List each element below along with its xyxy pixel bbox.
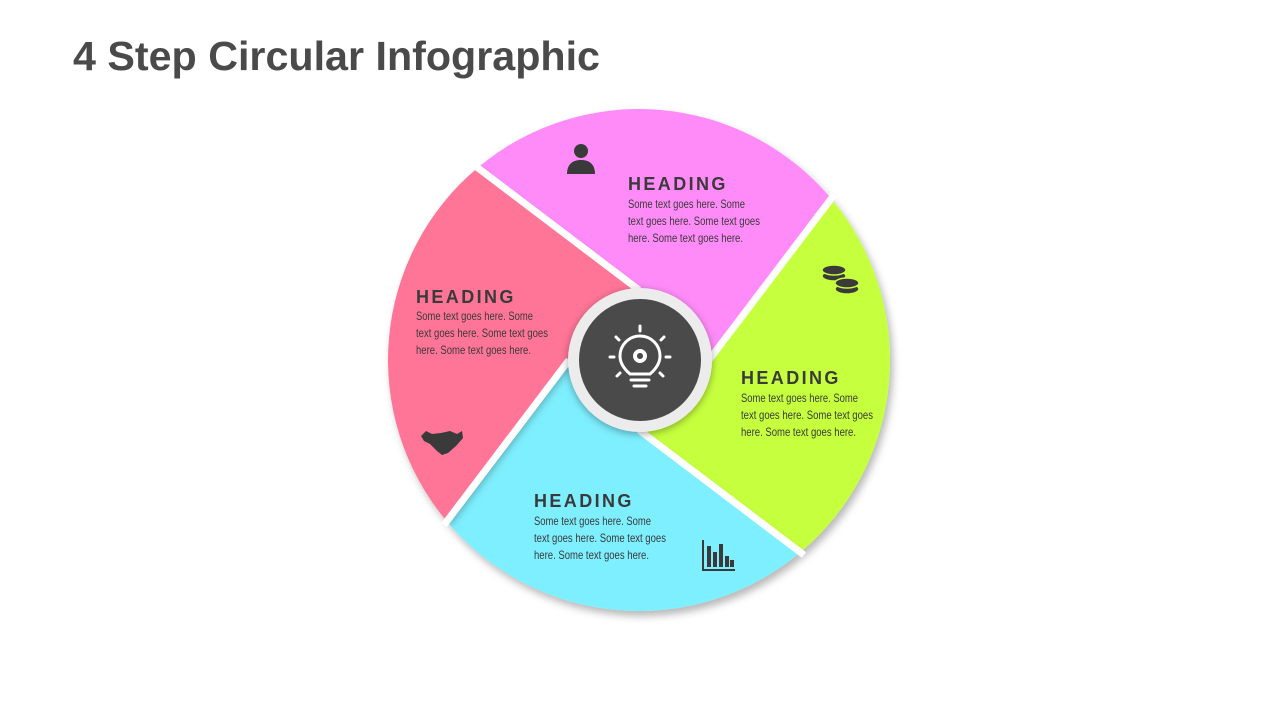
text block: cyan: text goes here. Some text goes	[534, 531, 666, 545]
text block: green	[741, 368, 873, 439]
text block: cyan	[534, 491, 666, 562]
panel: cyan segment	[447, 360, 800, 611]
text block: cyan: Some text goes here. Some	[534, 514, 651, 528]
text block: red	[416, 287, 548, 357]
text block: green: HEADING	[741, 368, 841, 388]
text block: cyan: here. Some text goes here.	[534, 548, 649, 562]
icon: lightbulb	[610, 326, 670, 386]
icon: coins	[822, 265, 859, 294]
panel: magenta segment	[478, 109, 831, 360]
text block: green: text goes here. Some text goes	[741, 408, 873, 422]
text block: red: here. Some text goes here.	[416, 343, 531, 357]
text block: red: Some text goes here. Some	[416, 309, 533, 323]
panel: green segment	[639, 199, 890, 552]
text block: red: HEADING	[416, 287, 516, 307]
icon: bar chart	[702, 540, 735, 571]
text block: magenta: text goes here. Some text goes	[628, 214, 760, 228]
icon: handshake	[421, 431, 463, 455]
panel: red segment	[388, 168, 639, 521]
text block: magenta	[628, 174, 760, 245]
text block: magenta: HEADING	[628, 174, 728, 194]
text block: green: here. Some text goes here.	[741, 425, 856, 439]
text block: green: Some text goes here. Some	[741, 391, 858, 405]
icon: person	[567, 144, 595, 174]
text block: magenta: here. Some text goes here.	[628, 231, 743, 245]
center hub	[568, 288, 712, 432]
text block: cyan: HEADING	[534, 491, 634, 511]
title: 4 Step Circular Infographic	[73, 33, 600, 79]
text block: magenta: Some text goes here. Some	[628, 197, 745, 211]
text block: red: text goes here. Some text goes	[416, 326, 548, 340]
